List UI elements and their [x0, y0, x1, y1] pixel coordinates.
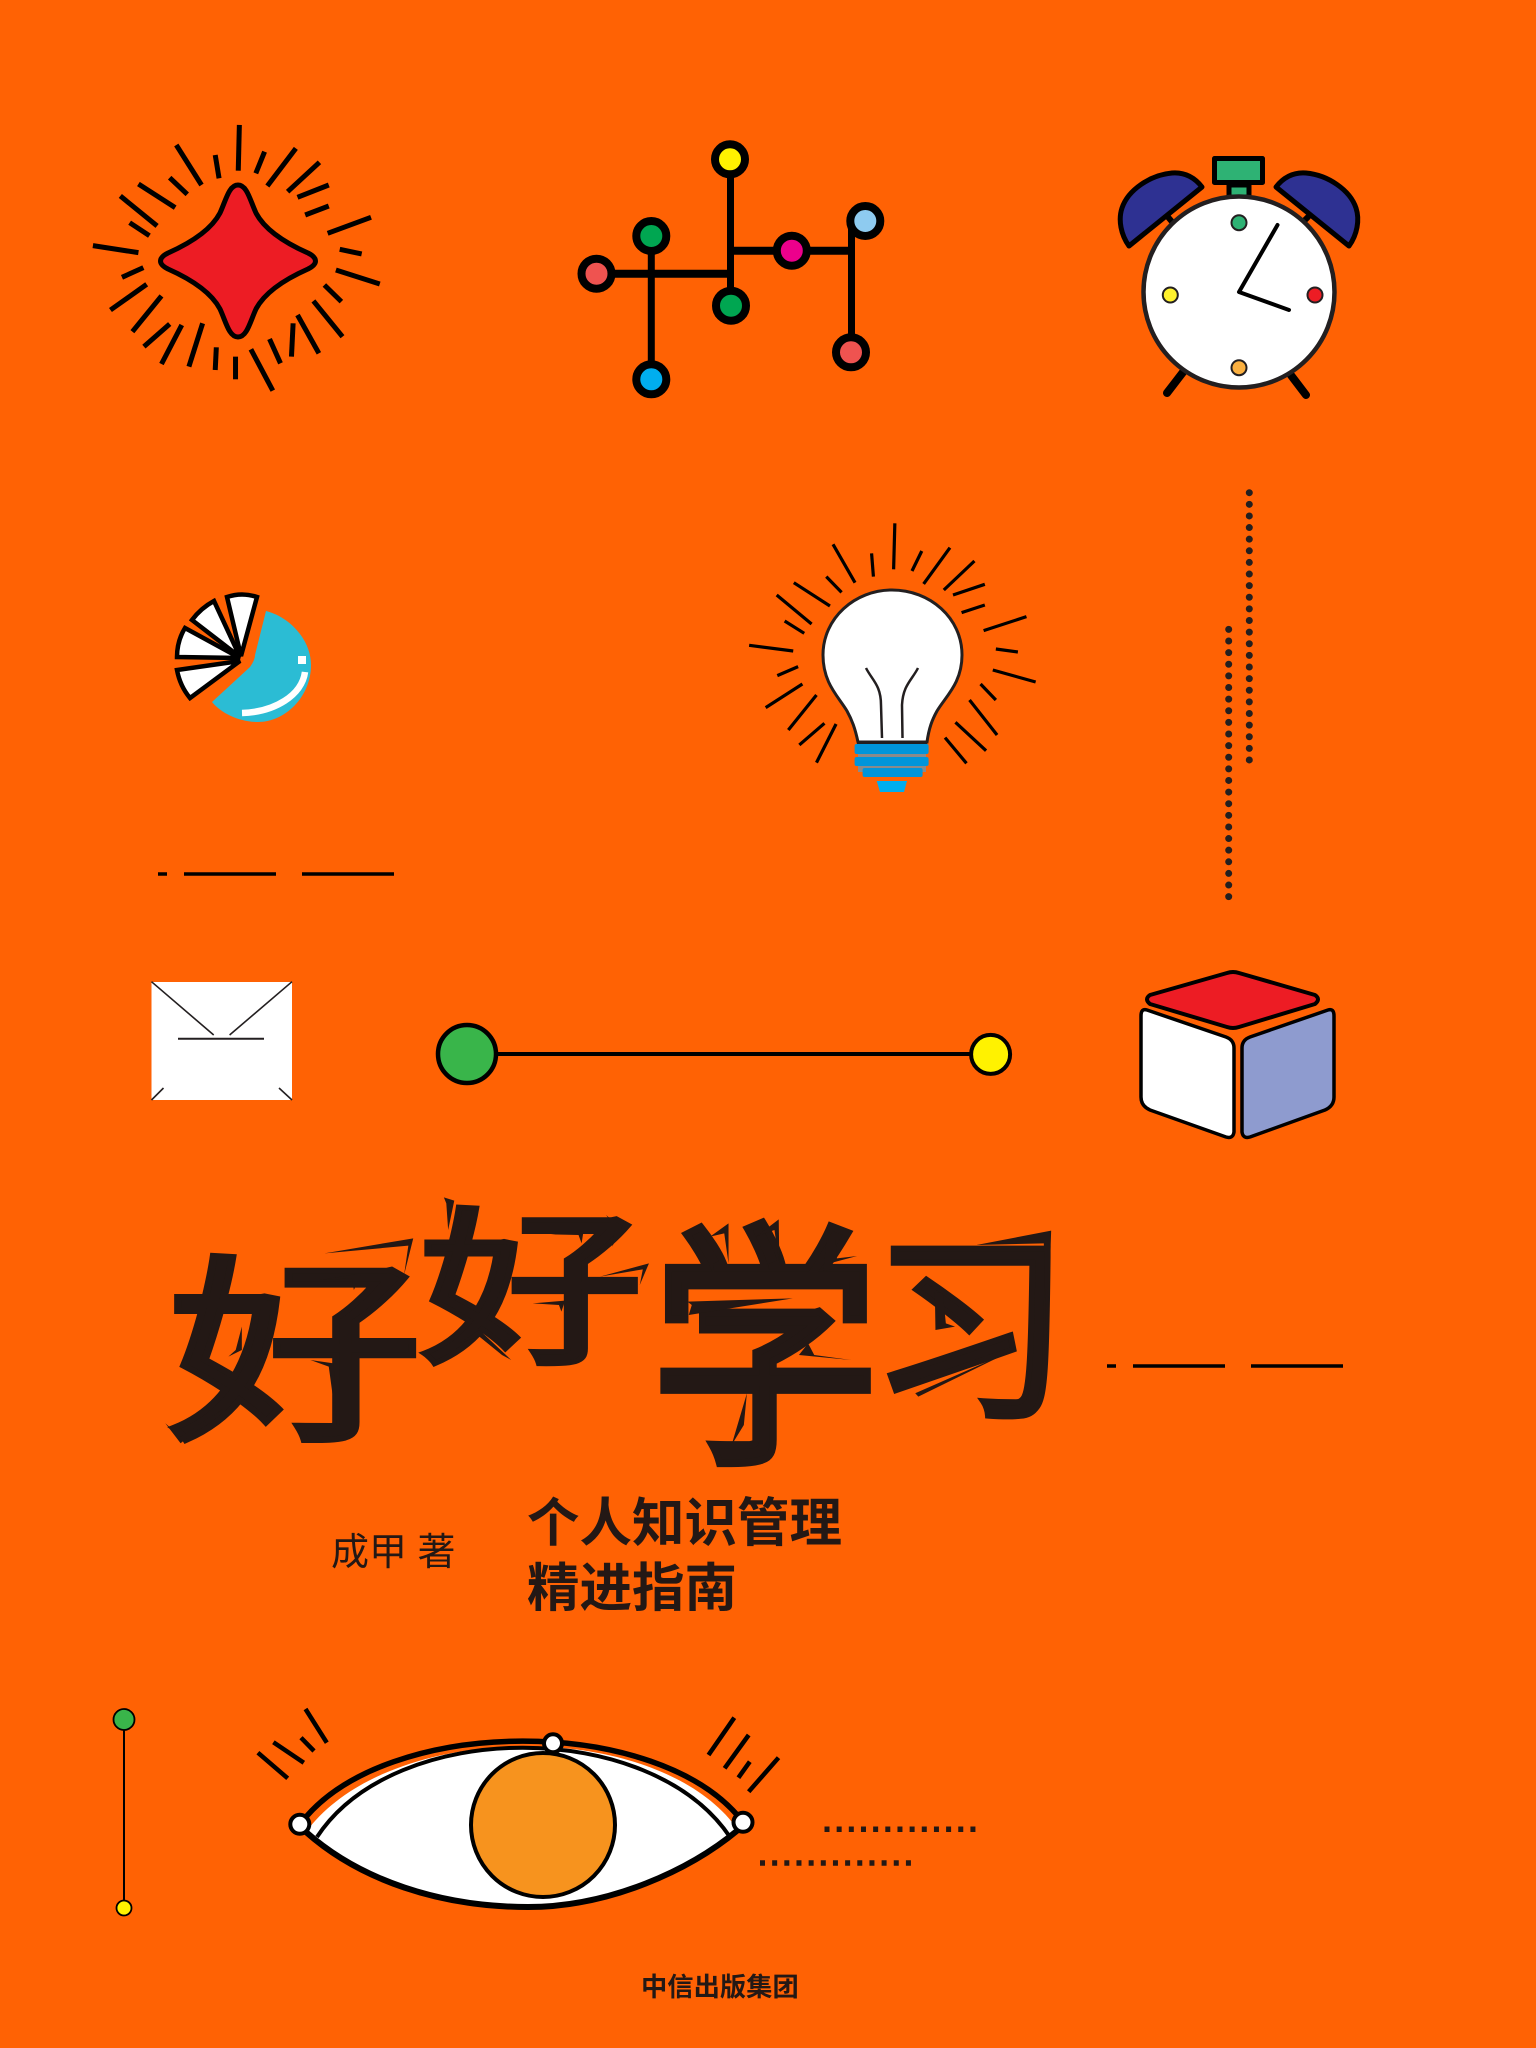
dash line right [1107, 1364, 1343, 1368]
bulb glass [823, 590, 962, 742]
eye lashes [258, 1709, 778, 1792]
title character 2: 好 [418, 1154, 644, 1399]
author: 成甲 著 [331, 1532, 456, 1574]
clock hour dots [1163, 215, 1322, 375]
icon: cube [1141, 972, 1334, 1137]
star rays [93, 125, 380, 391]
cube right face [1242, 1010, 1334, 1137]
pie main slice [212, 611, 311, 722]
title character 1: 好 [168, 1192, 422, 1482]
bulb base [855, 741, 929, 792]
icon: envelope [152, 982, 292, 1100]
title character 3: 学 [650, 1141, 880, 1518]
icon: alarm clock [1120, 158, 1358, 395]
envelope fold lines [152, 982, 292, 1100]
network nodes [582, 144, 880, 394]
clock bells [1120, 173, 1358, 246]
eye lid joints [290, 1734, 752, 1834]
subtitle [527, 1494, 842, 1618]
four-point star [160, 185, 316, 337]
publisher: 中信出版集团 [641, 1972, 799, 2002]
dash line left [158, 872, 394, 876]
dotted horizontal lines [760, 1829, 976, 1863]
clock button [1214, 158, 1262, 197]
envelope body [152, 982, 292, 1100]
pie white wedges [177, 594, 257, 698]
vertical line with dots [114, 1709, 134, 1916]
dotted vertical lines [1229, 493, 1249, 898]
connector line [497, 1052, 970, 1056]
connector: green to yellow dot [438, 1025, 1010, 1083]
clock feet [1167, 367, 1306, 395]
clock bell connectors [1168, 217, 1308, 223]
cube top [1147, 972, 1318, 1028]
subtitle line 2: 精进指南 [527, 1559, 737, 1618]
eye inner upper lid [317, 1748, 730, 1837]
icon: node network [582, 144, 880, 394]
eye outer upper lid [301, 1741, 743, 1823]
eye iris [471, 1753, 615, 1897]
icon: red star with rays [93, 125, 380, 391]
icon: pie chart [177, 594, 311, 722]
title [165, 1141, 1070, 1518]
pie highlight [242, 656, 305, 713]
yellow dot [971, 1035, 1010, 1074]
cube left face [1141, 1010, 1234, 1137]
green dot [438, 1025, 496, 1083]
title character 4: 习 [870, 1170, 1070, 1460]
eye white [306, 1746, 738, 1907]
clock hands [1239, 225, 1289, 310]
title shards [165, 1197, 1051, 1445]
vertical line [123, 1720, 125, 1908]
network lines [596, 159, 852, 379]
bulb rays [749, 523, 1036, 763]
bottom yellow dot [116, 1900, 132, 1916]
bulb filament [866, 668, 918, 738]
clock face [1144, 196, 1334, 388]
subtitle line 1: 个人知识管理 [527, 1494, 842, 1553]
top green dot [114, 1709, 134, 1730]
icon: light bulb [749, 523, 1036, 792]
icon: eye [258, 1709, 778, 1907]
eye lower lid [306, 1830, 738, 1907]
